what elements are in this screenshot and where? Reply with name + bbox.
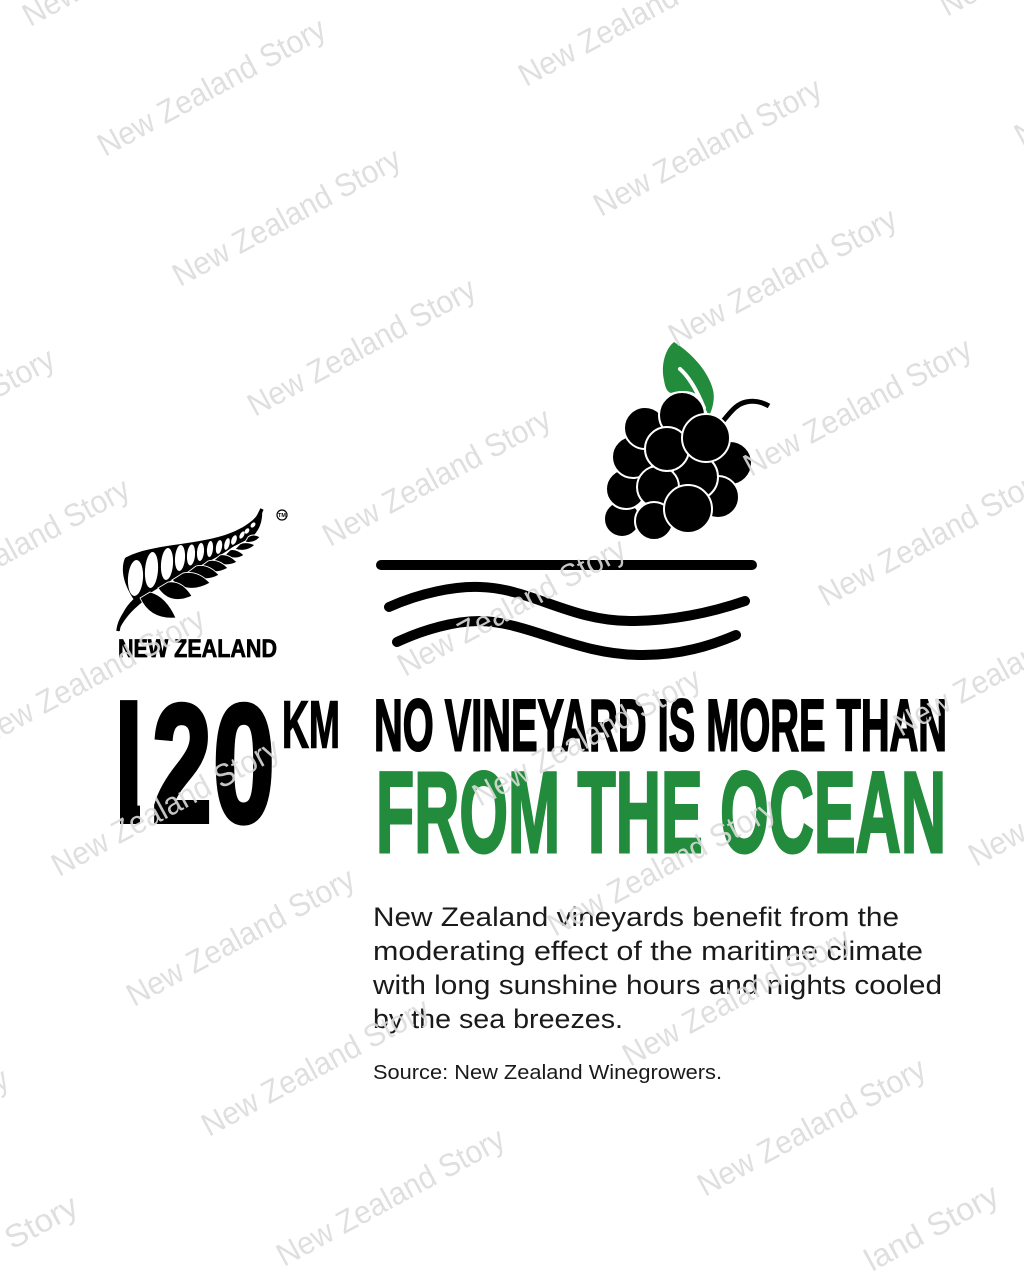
big number: 120 km	[120, 700, 338, 826]
watermark: repeating New Zealand Story: New Zealand Story	[316, 400, 557, 553]
watermark: repeating New Zealand Story: land Story	[858, 1176, 1005, 1278]
grape leaf	[663, 342, 714, 416]
watermark: repeating New Zealand Story: New Zealand Story	[691, 1050, 932, 1203]
icon: trademark mark: TM	[278, 513, 286, 519]
watermark: repeating New Zealand Story: New Zealand Story	[45, 730, 286, 883]
icon: grape bunch with leaf	[604, 342, 769, 540]
grape stem	[723, 401, 769, 421]
big number: 120 km: 1	[84, 661, 164, 863]
watermark: repeating New Zealand Story: New Zealand Story	[737, 330, 978, 483]
icon: trademark mark	[277, 510, 287, 520]
body text: with long sunshine hours and nights cooled	[372, 970, 942, 1000]
logo: silver fern with New Zealand wordmark	[118, 509, 287, 663]
logo wordmark: NEW ZEALAND	[118, 635, 277, 663]
source note: Source: New Zealand Winegrowers.	[373, 1062, 722, 1084]
big number: 120 km: 2	[152, 669, 212, 857]
watermark: repeating New Zealand Story: New Zealand Story	[195, 990, 436, 1143]
watermark: repeating New Zealand Story: New Zealand Story	[662, 200, 903, 353]
watermark: repeating New Zealand Story: New Zealand Story	[166, 140, 407, 293]
body text: New Zealand vineyards benefit from the	[373, 902, 899, 932]
watermark: repeating New Zealand Story: New Zealand Story	[120, 860, 361, 1013]
leaf vein	[680, 369, 704, 408]
watermark: repeating New Zealand Story: Story	[0, 1187, 84, 1256]
body text: by the sea breezes.	[373, 1004, 623, 1034]
watermark: repeating New Zealand Story: New Zealand Story	[241, 270, 482, 423]
big number: 120 km: 0	[213, 670, 275, 858]
watermark: repeating New Zealand Story: New Zealand Story	[466, 660, 707, 813]
watermark: repeating New Zealand Story: New Zealand Story	[541, 790, 782, 943]
watermark: repeating New Zealand Story: New Zealand Story	[270, 1120, 511, 1273]
watermark: repeating New Zealand Story: New Zealand Story	[587, 70, 828, 223]
grapes	[604, 392, 752, 540]
big number: 120 km: KM	[282, 688, 340, 762]
watermark: repeating New Zealand Story: New Zealand Story	[616, 920, 857, 1073]
icon: silver fern	[118, 509, 262, 632]
icon: ground line and ocean waves	[381, 565, 752, 655]
watermark: repeating New Zealand Story: New Zealand Story	[391, 530, 632, 683]
body text: moderating effect of the maritime climate	[373, 936, 923, 966]
body text	[372, 902, 942, 1034]
watermark: repeating New Zealand Story: New Zealand Story	[91, 10, 332, 163]
